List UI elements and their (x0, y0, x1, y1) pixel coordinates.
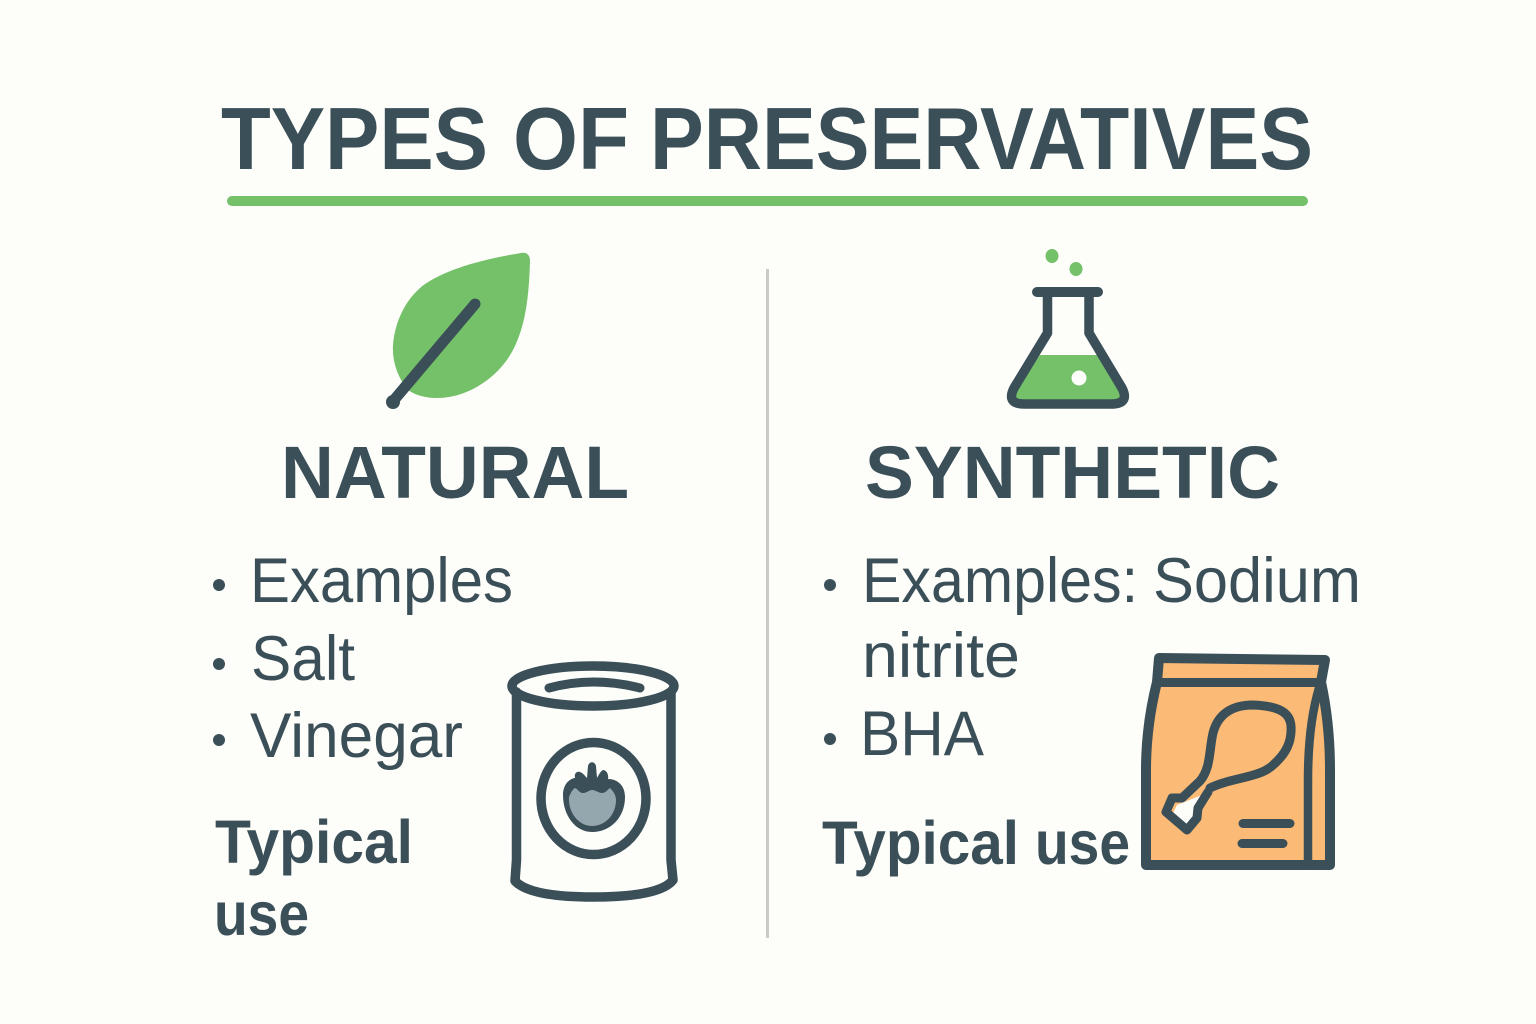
list: natural examples: Vinegar (250, 701, 463, 771)
text: synthetic typical use: use (1035, 809, 1130, 877)
text: natural typical use: Typical (215, 808, 413, 876)
list: natural examples (213, 546, 513, 771)
list: synthetic examples: BHA (860, 699, 984, 769)
list: natural examples: Examples (250, 546, 513, 616)
list: synthetic examples (824, 546, 1361, 769)
title: PRESERVATIVES (650, 89, 1313, 188)
list: synthetic examples: Sodium (1153, 546, 1361, 616)
list: natural examples: Salt (251, 624, 355, 694)
icon: food bag (1146, 658, 1330, 865)
list: synthetic examples: nitrite (862, 621, 1020, 691)
panel: synthetic (822, 249, 1361, 877)
icon: flask (1012, 249, 1124, 404)
list: synthetic examples: Examples: (862, 546, 1138, 616)
icon: tin can (512, 666, 674, 897)
text: synthetic typical use: Typical (822, 809, 1019, 877)
center divider (766, 269, 769, 938)
text: natural typical use: use (214, 880, 309, 948)
icon: leaf (386, 253, 530, 409)
panel: natural (213, 253, 674, 948)
title: TYPES (221, 89, 488, 188)
title underline (227, 196, 1308, 206)
title (221, 89, 1313, 188)
heading: natural: NATURAL (281, 431, 629, 514)
title: OF (513, 89, 629, 188)
heading: synthetic: SYNTHETIC (865, 431, 1280, 514)
text: natural typical use (214, 808, 413, 948)
text: synthetic typical use (822, 809, 1130, 877)
